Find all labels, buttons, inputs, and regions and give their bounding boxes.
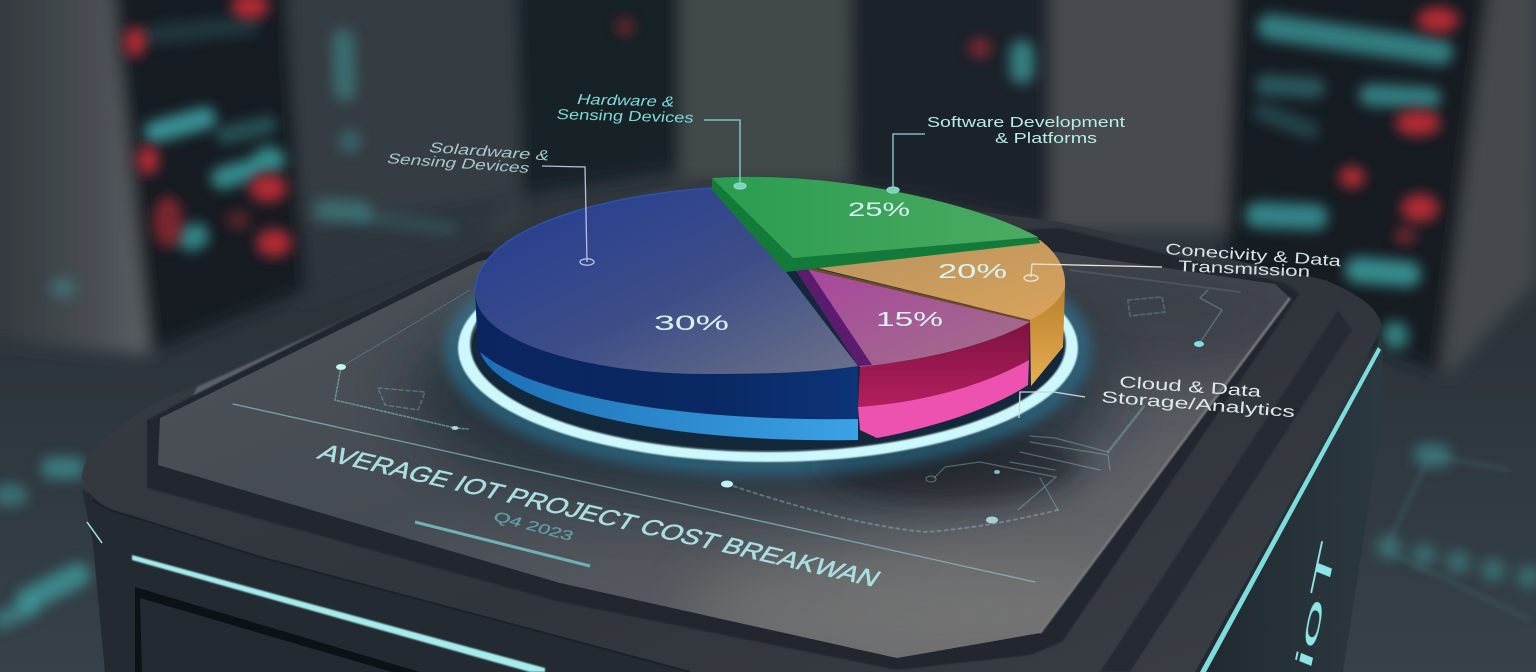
upper right shading — [1058, 254, 1290, 394]
drawer panel — [140, 598, 392, 672]
callout labels — [385, 92, 1342, 421]
slice: magenta 15% — [793, 266, 1030, 438]
front glow strip — [132, 555, 545, 672]
label: software — [927, 115, 1125, 147]
plate circuit lines — [233, 270, 1240, 582]
label: cloud — [1101, 374, 1295, 421]
plate surface — [158, 252, 1290, 658]
label: hardware: Hardware & — [575, 92, 677, 110]
value 30%: 30% — [654, 312, 729, 335]
subtitle: Q4 2023 — [490, 509, 576, 545]
value 25%: 25% — [848, 200, 910, 221]
label: software: Software Development — [927, 115, 1125, 131]
label: solar hardware: Sensing Devices — [385, 152, 532, 177]
leader: cloud — [1019, 392, 1085, 418]
label: hardware — [555, 92, 695, 127]
leader lines and markers — [542, 120, 1162, 418]
percentage labels — [654, 200, 1007, 335]
title underline — [415, 522, 590, 566]
value 15%: 15% — [876, 309, 943, 331]
right rim groove — [1100, 310, 1352, 672]
drawer recess — [135, 587, 420, 672]
label: connectivity: Conecivity & Data — [1165, 241, 1342, 270]
title block — [312, 440, 886, 592]
title: AVERAGE IOT PROJECT COST BREAKWAN — [312, 440, 886, 592]
label: solar hardware: Solardware & — [427, 141, 552, 164]
corner glow strip — [87, 522, 102, 543]
lower right highlight — [703, 545, 1083, 658]
rim lower shadow line — [93, 500, 690, 672]
value 20%: 20% — [938, 261, 1007, 283]
leader: software — [887, 134, 925, 193]
label: solar hardware — [385, 141, 552, 177]
3D pie chart — [475, 177, 1065, 440]
device front face — [82, 490, 700, 672]
plate circuit nodes — [336, 341, 1204, 524]
slice: green 25% — [712, 177, 1040, 272]
plate groove — [147, 228, 1300, 670]
label: connectivity — [1165, 241, 1342, 281]
label: hardware: Sensing Devices — [555, 107, 695, 127]
slice: blue 30% — [475, 188, 858, 440]
device right side face — [1195, 335, 1383, 672]
plate right bevel — [1040, 298, 1290, 633]
device top outer rim — [82, 178, 1381, 672]
slice: orange 20% — [795, 240, 1065, 386]
leader: hardware — [704, 120, 746, 189]
leader: solar hardware — [542, 166, 594, 265]
label: cloud: Storage/Analytics — [1101, 389, 1295, 421]
label: software: & Platforms — [995, 131, 1097, 147]
glowing ring — [454, 234, 1082, 466]
dark shading around the ring — [410, 283, 1110, 507]
leader: connectivity — [1024, 264, 1162, 281]
right glow strip — [1200, 347, 1381, 672]
label: connectivity: Transmission — [1178, 258, 1310, 281]
device pedestal — [82, 178, 1383, 672]
rim upper left highlight — [193, 252, 480, 396]
pie cast shadow — [820, 427, 1080, 503]
label: cloud: Cloud & Data — [1119, 374, 1262, 401]
